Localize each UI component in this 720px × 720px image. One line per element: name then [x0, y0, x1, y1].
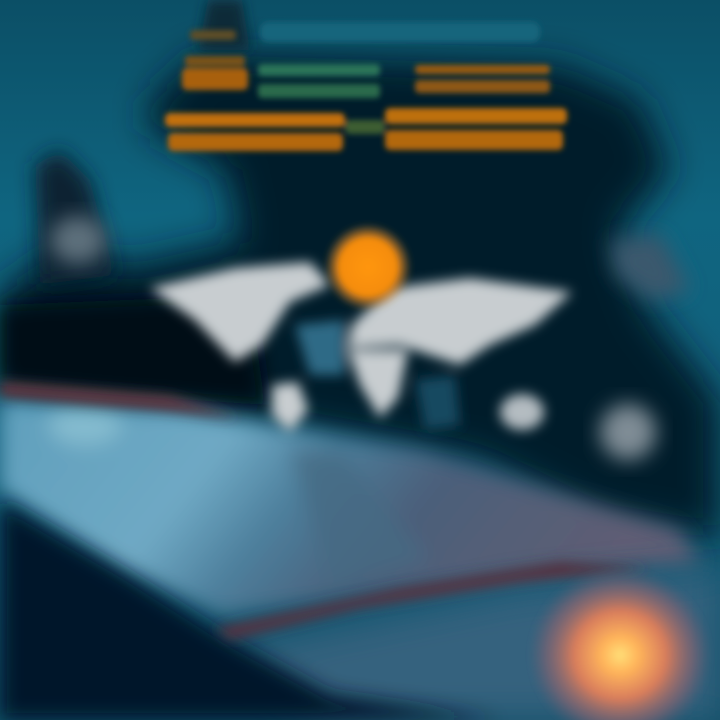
silhouette: central dark mass [0, 55, 720, 540]
corner: dark bottom-left wedge [0, 500, 500, 720]
heading: blurred title text [165, 22, 567, 151]
figure: left grey blob [50, 216, 106, 264]
glow: orange light at bottom right [528, 567, 712, 720]
streak: upper red reflection [0, 382, 240, 418]
figure: right grey blob [610, 235, 690, 300]
streak: red reflection line [215, 562, 650, 640]
table: light blue surface [0, 400, 700, 615]
wheel: right circular icon [600, 404, 656, 460]
tower: top dark spire [198, 0, 250, 50]
silhouette: figure at left [35, 150, 115, 285]
lower panel: bottom blue-grey area [230, 570, 720, 720]
silhouette: black band at left [0, 295, 265, 405]
icon: orange sun [324, 223, 412, 311]
world map: white continents [150, 262, 572, 432]
